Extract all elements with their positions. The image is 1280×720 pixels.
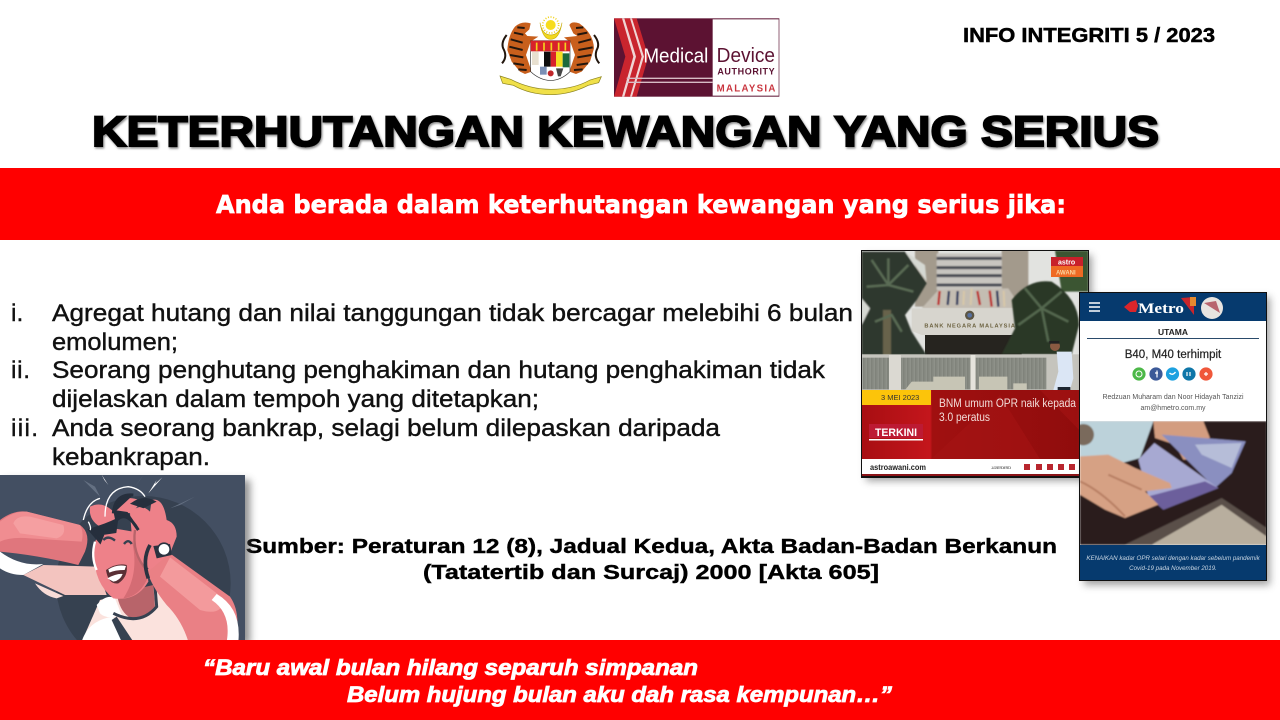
gate: [862, 354, 1082, 391]
icon: crescent and sun: [540, 17, 562, 39]
icon: left tiger: [502, 23, 538, 74]
image: Astro Awani news card: BNM umum OPR naik kepada: [939, 398, 1077, 410]
item i: i.: [11, 300, 23, 327]
shirt sleeve: [23, 565, 107, 595]
item ii: ii.: [11, 357, 30, 384]
logo: Malaysia coat of arms: [500, 17, 601, 95]
mouth: [106, 564, 127, 583]
image: Astro Awani news card: AWANI: [1056, 270, 1076, 276]
byline: Redzuan Muharam dan Noor Hidayah Tanzizi: [1102, 394, 1244, 401]
footer strip: [862, 459, 1079, 474]
item iii: [11, 415, 720, 471]
metro section and headline: B40, M40 terhimpit: [1125, 349, 1222, 361]
item ii: dijelaskan dalam tempoh yang ditetapkan;: [52, 386, 539, 413]
logo: Medical Device Authority Malaysia: [614, 18, 779, 97]
metro section and headline: [1087, 327, 1259, 361]
red footer with quote: [0, 640, 1280, 720]
logo text: Device: [717, 44, 775, 67]
hair: [90, 495, 153, 542]
palm trees: [862, 251, 1088, 355]
source citation: [246, 535, 1057, 584]
red headline panel: [862, 390, 1089, 459]
left arm: [0, 511, 87, 565]
logo text: [643, 44, 775, 94]
hand gripping head: [90, 498, 140, 527]
image: Harian Metro news card: [1073, 292, 1270, 585]
item iii: iii.: [11, 415, 38, 442]
metro section and headline: UTAMA: [1158, 327, 1188, 337]
man on phone: [1049, 341, 1073, 390]
title: KETERHUTANGAN KEWANGAN YANG SERIUS: [92, 108, 1159, 156]
info label: INFO INTEGRITI 5 / 2023: [963, 24, 1215, 47]
icon: right tiger: [564, 22, 599, 74]
item i: Agregat hutang dan nilai tanggungan tidak bercagar melebihi 6 bulan: [52, 300, 853, 327]
red footer with quote: “Baru awal bulan hilang separuh simpanan: [203, 655, 698, 680]
image: Astro Awani news card: 3.0 peratus: [939, 412, 990, 424]
share icons: [1132, 367, 1213, 381]
bank sign and entrance: [912, 308, 1027, 357]
image: Astro Awani news card: JUGA TERDAPAT DI:: [991, 466, 1011, 470]
astro logo: [1051, 257, 1083, 266]
logo text: AUTHORITY: [717, 67, 775, 77]
image: Astro Awani news card: 3 MEI 2023: [881, 393, 919, 402]
eyes and brows: [103, 538, 132, 544]
item ii: Seorang penghutang penghakiman dan hutang penghakiman tidak: [52, 357, 826, 384]
image: Astro Awani news card: TERKINI: [875, 427, 917, 439]
right forearm: [147, 553, 237, 642]
source citation: (Tatatertib dan Surcaj) 2000 [Akta 605]: [423, 561, 879, 584]
byline: [1102, 394, 1244, 412]
image: Harian Metro news card: KENAIKAN kadar OPR selari dengan kadar sebelum pandemik: [1086, 555, 1261, 562]
metro header: [1080, 293, 1266, 321]
red footer with quote: Belum hujung bulan aku dah rasa kempunan…”: [347, 682, 892, 707]
face: [94, 527, 148, 599]
icon: red chevron stripes: [614, 18, 648, 97]
item iii: Anda seorang bankrap, selagi belum dilepaskan daripada: [52, 415, 720, 442]
illustration: stressed man: [0, 474, 256, 640]
logo text: Medical: [643, 45, 708, 68]
item ii: [11, 357, 826, 413]
image: Astro Awani news card: astroawani.com: [870, 462, 926, 472]
source citation: Sumber: Peraturan 12 (8), Jadual Kedua, Akta Badan-Badan Berkanun: [246, 535, 1057, 558]
stress arcs and lightning: [83, 487, 145, 530]
metro header: Metro: [1138, 301, 1184, 317]
building: [915, 250, 1028, 308]
item i: emolumen;: [52, 329, 178, 356]
image: Astro Awani news card: astro: [1058, 260, 1075, 266]
red banner: subtitle: [0, 168, 1280, 240]
caption strip: [1080, 545, 1266, 580]
image: Astro Awani news card: [861, 250, 1092, 481]
photo: hands with banknotes: [1073, 421, 1267, 545]
logo text: MALAYSIA: [717, 83, 775, 94]
icon: shield: [531, 41, 570, 81]
red banner: subtitle: Anda berada dalam keterhutangan kewangan yang serius jika:: [216, 190, 1066, 219]
item iii: kebankrapan.: [52, 444, 210, 471]
item i: [11, 300, 853, 356]
torso: [84, 588, 188, 640]
bank sign and entrance: BANK NEGARA MALAYSIA: [924, 323, 1015, 329]
icon: yellow motto ribbon: [500, 76, 601, 95]
watch: [145, 545, 150, 578]
byline: am@hmetro.com.my: [1140, 405, 1206, 412]
list of conditions: [11, 300, 853, 471]
image: Harian Metro news card: Covid-19 pada November 2019.: [1129, 565, 1217, 572]
